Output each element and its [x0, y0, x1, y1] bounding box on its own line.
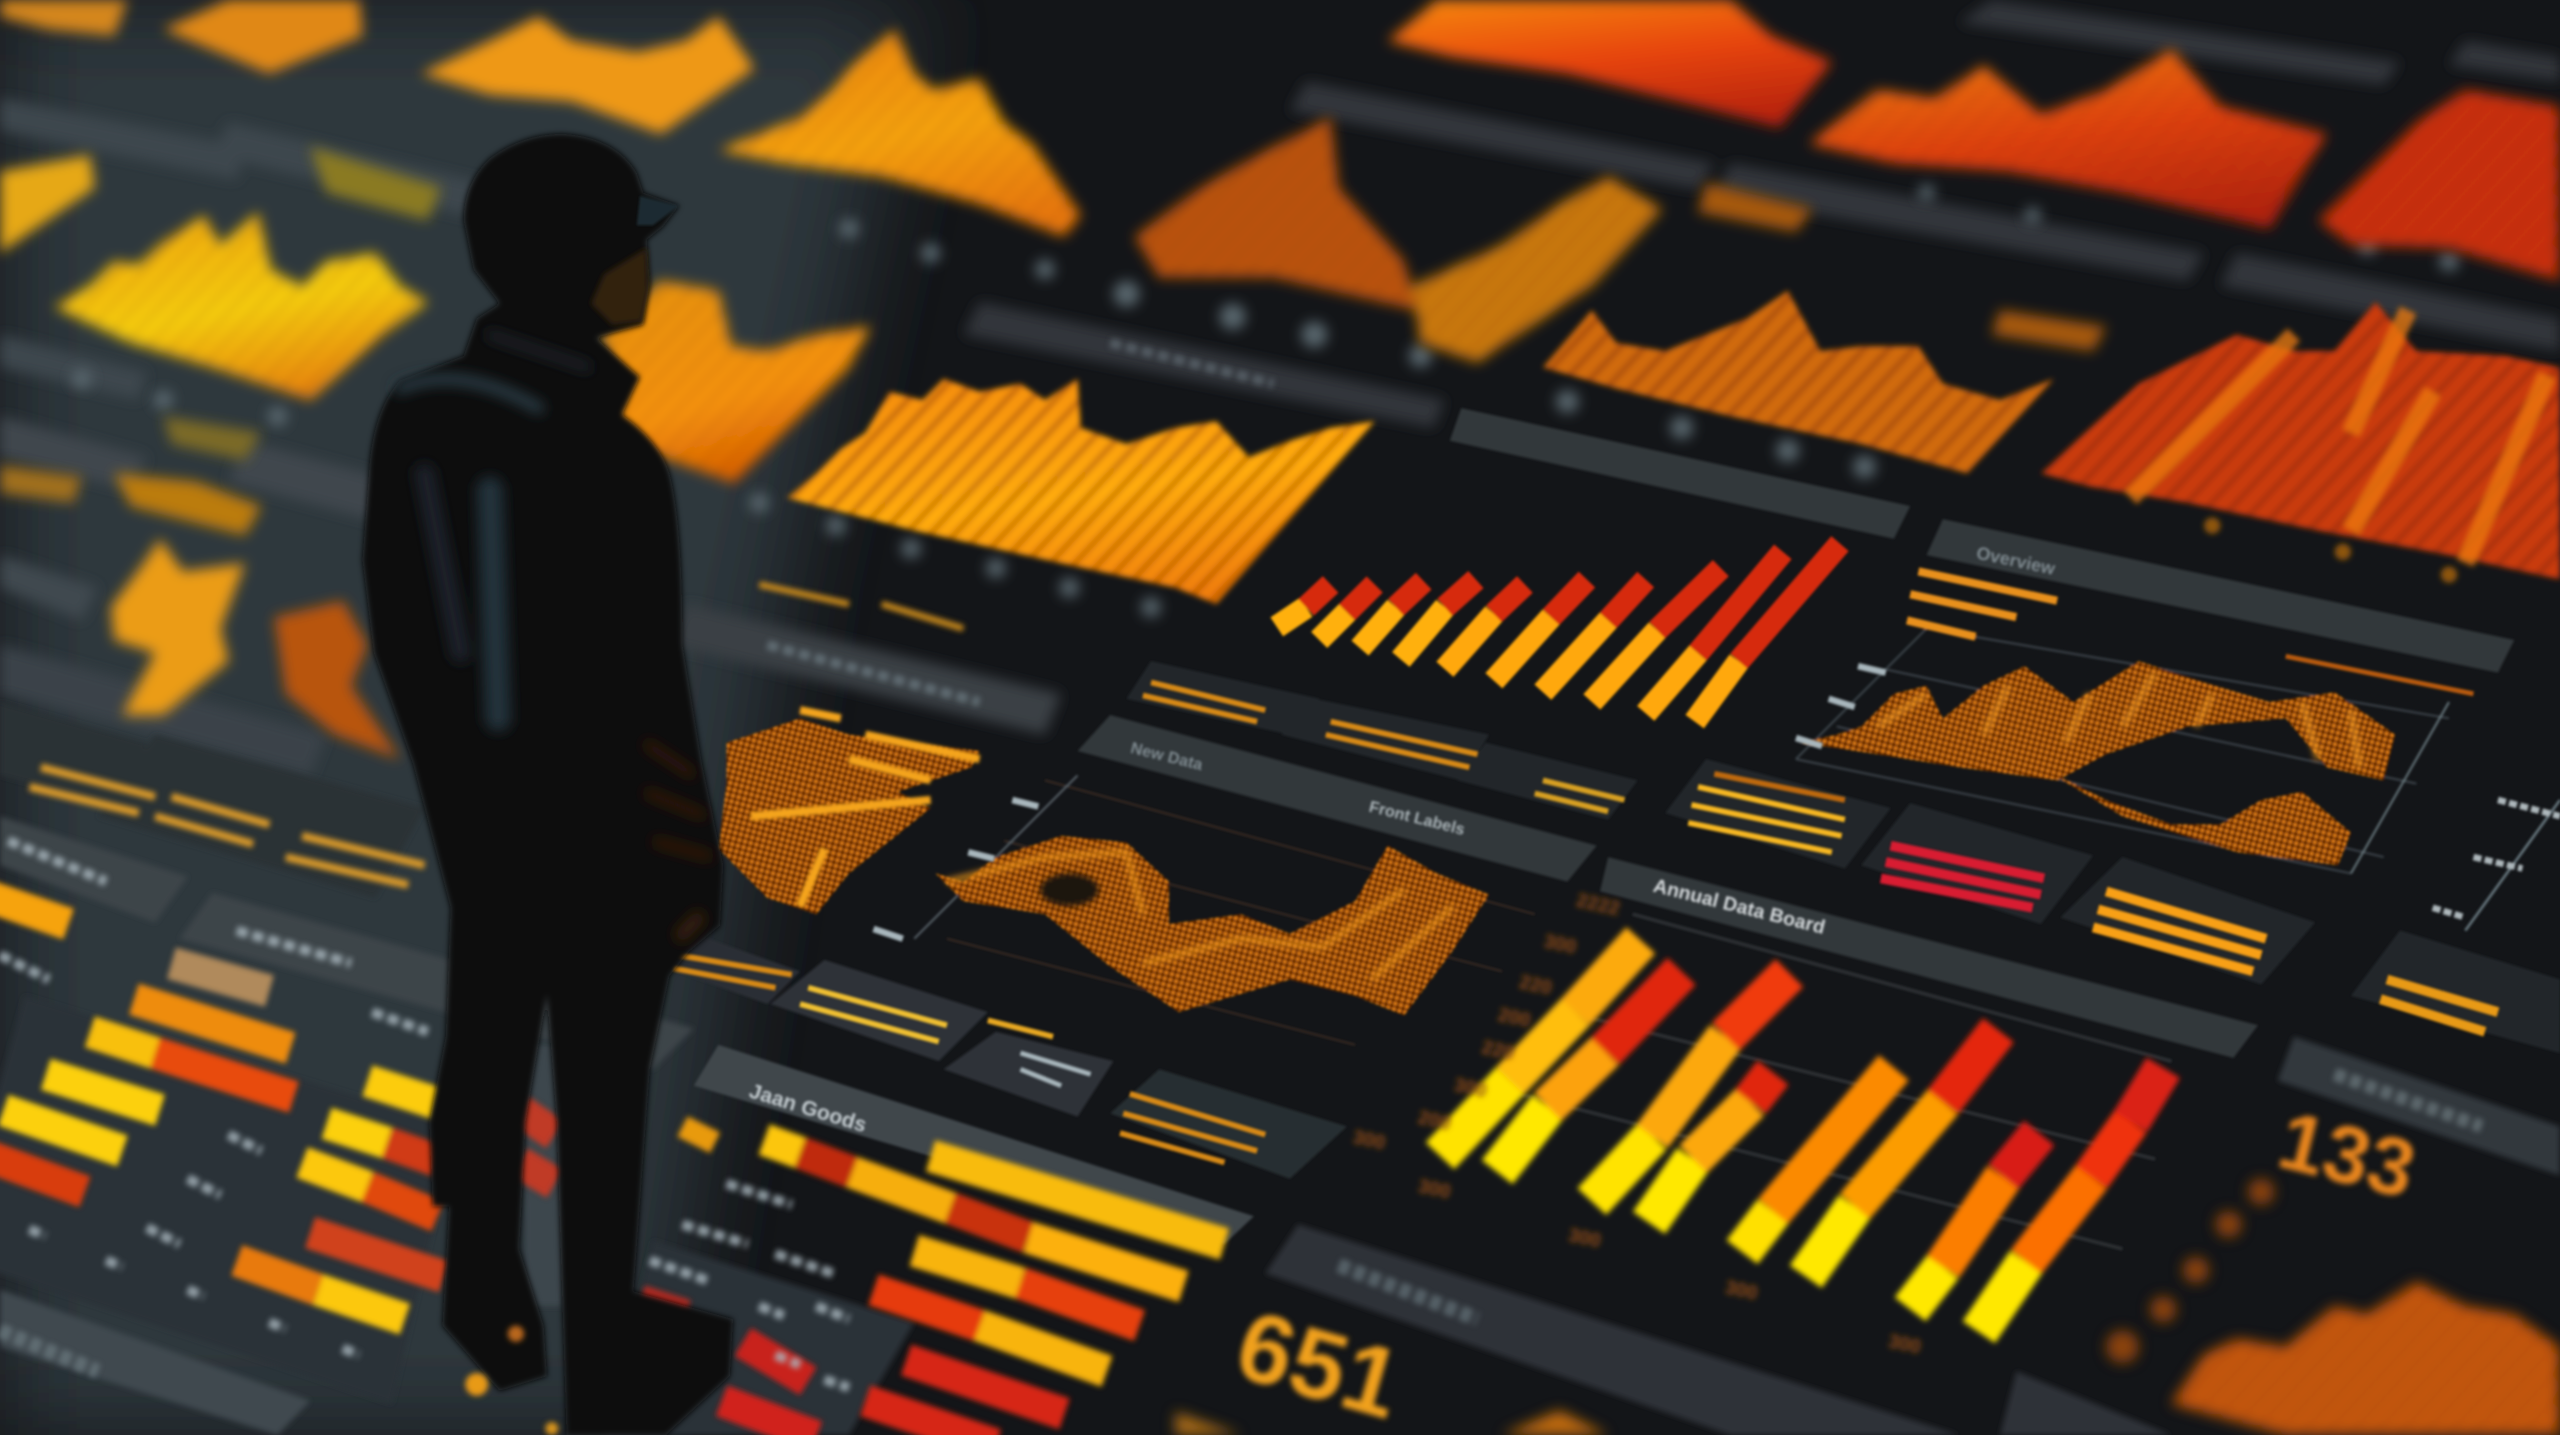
bright ridges	[1878, 673, 2359, 767]
chart axis lines	[914, 775, 1535, 1045]
axis labels: 300	[1566, 1224, 1603, 1252]
axis labels: 300	[1542, 930, 1578, 959]
mini panel: yellow stripes	[1688, 774, 1845, 852]
right edge fragments	[2433, 800, 2560, 931]
bar label rows	[1907, 571, 2473, 694]
axis labels: 220	[1517, 971, 1554, 999]
mini panel: orange stripes	[2093, 891, 2266, 971]
near blurred chart bottom right	[1176, 1179, 2560, 1435]
chart: dotted waves right	[1796, 571, 2473, 873]
axis labels: 300	[1351, 1126, 1387, 1154]
far chart: yellow area left	[54, 212, 428, 400]
far chart: ochre pair	[1135, 118, 1417, 310]
axis labels: 200	[1496, 1004, 1533, 1032]
shoe glints	[465, 1326, 558, 1435]
orange bar area charts	[787, 291, 2560, 604]
chart: red bars right	[2041, 302, 2560, 580]
axis labels: 300	[1452, 1074, 1489, 1102]
axis labels: 300	[1886, 1330, 1923, 1359]
axis labels: 220	[1480, 1036, 1516, 1065]
label: side title: New Data	[1129, 739, 1205, 774]
grey row markers	[873, 666, 1886, 1086]
label: panel title: Overview	[1975, 543, 2057, 579]
mini panel: right orange	[2380, 980, 2498, 1032]
mini panels	[653, 661, 2560, 1179]
person silhouette	[362, 134, 733, 1435]
mid header bars	[694, 408, 2514, 1244]
near header bars	[0, 816, 2560, 1435]
large bar chart	[1351, 889, 2171, 1359]
chart: dotted map centre	[914, 775, 1535, 1045]
left bottom status bars	[0, 895, 555, 1319]
big number 133: 133	[2270, 1095, 2424, 1216]
chart: red and yellow stacked bars	[1277, 544, 1840, 722]
far chart: top right red orange	[1809, 49, 2327, 229]
mini panel: red stripes	[1881, 846, 2044, 908]
axis lines	[1796, 629, 2449, 873]
far chart: top left orange	[421, 16, 754, 134]
bars	[1440, 940, 2163, 1332]
jacket highlights	[400, 335, 588, 718]
grey text pills	[0, 343, 2482, 1388]
label: map title: Front Labels	[1367, 798, 1467, 839]
centre bottom status bars	[640, 1126, 1224, 1435]
bright ridges	[947, 852, 1453, 980]
chart tick labels	[2204, 518, 2457, 583]
axis labels: 2222	[1574, 889, 1622, 920]
face	[591, 248, 648, 325]
axis markers under charts	[72, 184, 2459, 617]
far chart: behind shoulder	[601, 281, 870, 483]
highlighted stripes	[2131, 310, 2547, 563]
warm sleeve glow	[645, 743, 712, 939]
left cell panels	[0, 702, 914, 1435]
far chart: top centre red orange	[1388, 0, 1832, 127]
map charts left	[111, 539, 245, 715]
axis labels: 300	[1416, 1175, 1453, 1203]
axis labels: 200	[1416, 1107, 1453, 1135]
mini panel charts	[673, 666, 2498, 1162]
dark holes	[1040, 873, 1099, 906]
fiery map left of centre	[718, 710, 980, 914]
left far mini panels	[29, 584, 963, 885]
gridlines	[1518, 914, 2171, 1249]
chart: orange bars centre	[787, 379, 1375, 604]
far chart: right red	[2318, 90, 2560, 281]
label: goods title: Jaan Goods	[746, 1080, 869, 1137]
far header bars	[0, 0, 2560, 775]
header text	[746, 543, 2057, 1137]
label: chart title: Annual Data Board	[1651, 875, 1827, 939]
cap brim	[637, 196, 679, 225]
chart: orange spiky	[1543, 291, 2054, 473]
axis labels	[1351, 889, 1923, 1359]
body	[362, 134, 733, 1435]
axis labels: 300	[1723, 1276, 1760, 1305]
far blurred orange area charts	[0, 0, 2560, 759]
far chart: orange peak	[718, 29, 1081, 237]
